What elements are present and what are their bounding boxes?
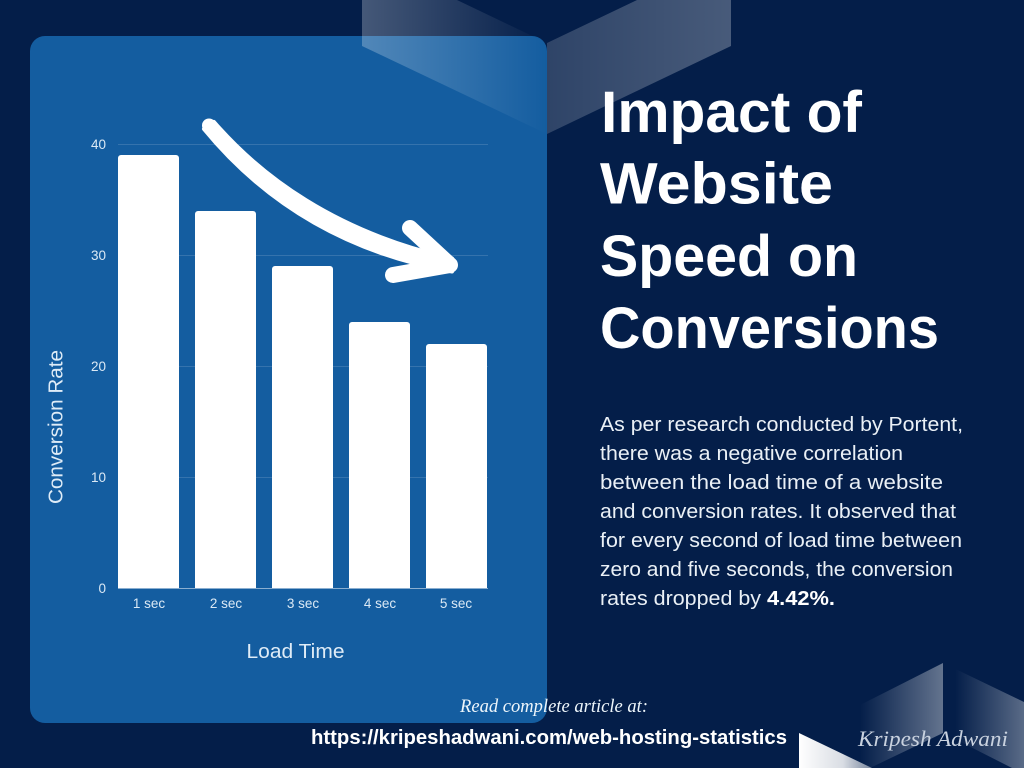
x axis tick labels: 2 sec xyxy=(210,596,242,611)
body text: As per research conducted by Portent, xyxy=(600,414,963,436)
title xyxy=(600,80,939,361)
y axis tick labels: 10 xyxy=(91,470,106,485)
footer: read article caption: Read complete article at: xyxy=(459,696,648,717)
x axis tick labels xyxy=(133,596,472,611)
body text: 4.42%. xyxy=(767,588,835,610)
y axis tick labels: 20 xyxy=(91,359,106,374)
title: Website xyxy=(600,152,833,216)
y axis tick labels: 0 xyxy=(98,581,106,596)
x axis title: Load Time xyxy=(246,640,344,663)
bars xyxy=(118,155,487,588)
title: Speed on xyxy=(600,224,858,289)
x axis tick labels: 1 sec xyxy=(133,596,165,611)
decorative hexagon top xyxy=(362,0,731,134)
bar chart xyxy=(91,137,488,611)
x axis tick labels: 5 sec xyxy=(440,596,472,611)
title: Conversions xyxy=(600,296,939,361)
body text: rates dropped by xyxy=(600,588,761,610)
arrow: downward trend xyxy=(202,118,452,275)
body text: there was a negative correlation xyxy=(600,443,903,465)
y axis tick labels: 40 xyxy=(91,137,106,152)
y axis title: Conversion Rate xyxy=(46,350,68,504)
y axis tick labels xyxy=(91,137,106,596)
y axis tick labels: 30 xyxy=(91,248,106,263)
decorative hexagon bottom right xyxy=(799,663,1024,768)
body text: zero and five seconds, the conversion xyxy=(600,559,953,581)
body text xyxy=(600,414,963,610)
panel: chart card xyxy=(30,36,547,723)
body text: for every second of load time between xyxy=(600,530,962,552)
x axis tick labels: 3 sec xyxy=(287,596,319,611)
title: Impact of xyxy=(601,80,863,145)
body text: between the load time of a website xyxy=(600,472,943,494)
footer: article url: https://kripeshadwani.com/web-hosting-statistics xyxy=(311,727,787,749)
body text: and conversion rates. It observed that xyxy=(600,501,956,523)
x axis tick labels: 4 sec xyxy=(364,596,396,611)
signature: Kripesh Adwani xyxy=(857,726,1008,751)
